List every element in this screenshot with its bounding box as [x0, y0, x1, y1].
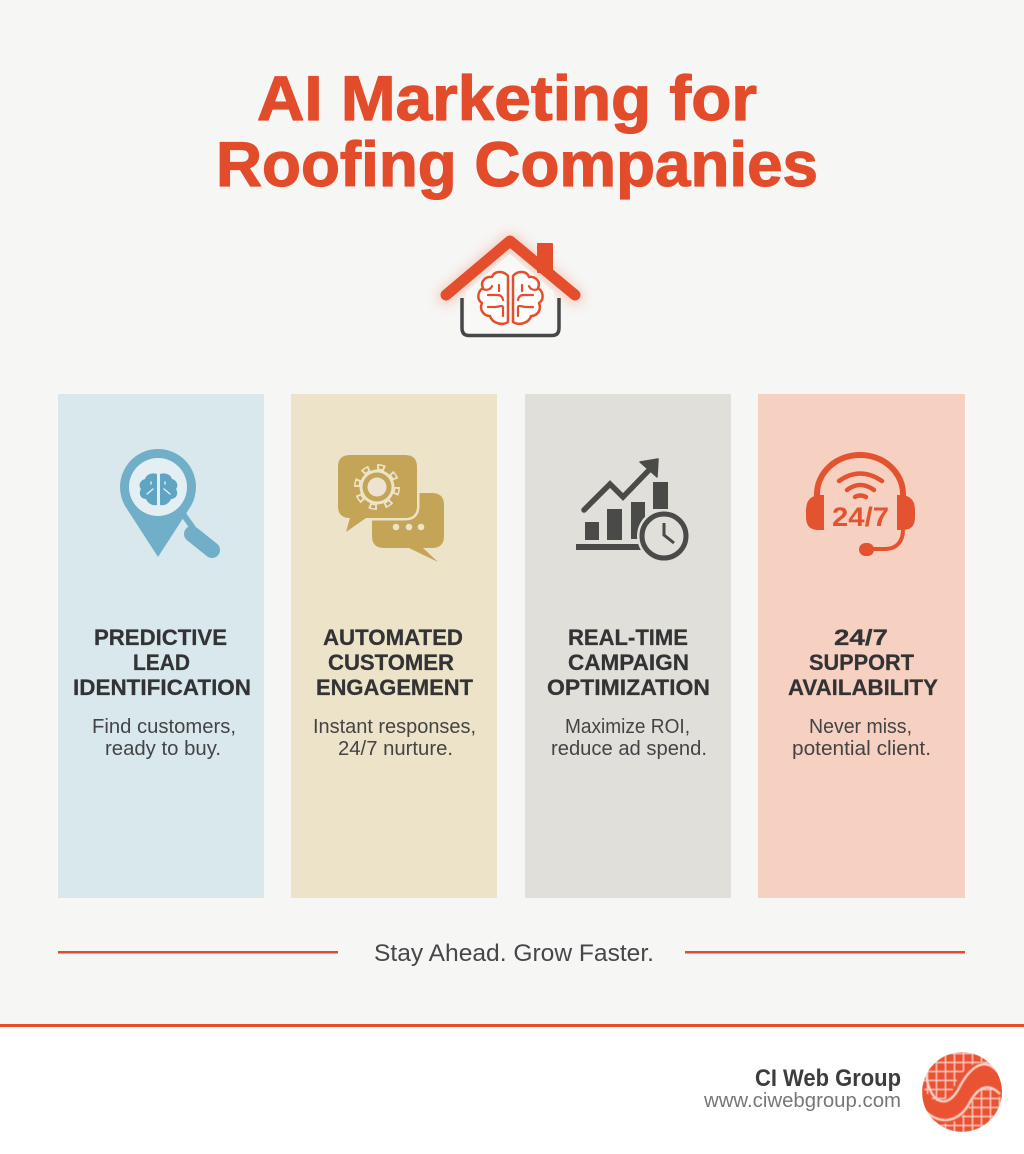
icon: location pin with magnifier and brain	[120, 449, 212, 557]
icon: chat bubbles with gear	[338, 455, 444, 562]
heading	[73, 625, 251, 700]
heading: 24/7	[834, 625, 888, 650]
title: Roofing Companies	[216, 130, 818, 200]
description: Instant responses,	[313, 716, 476, 738]
description: Never miss,	[809, 716, 912, 738]
heading: AVAILABILITY	[788, 675, 938, 700]
heading: CUSTOMER	[328, 650, 454, 675]
icon: growth chart with clock	[576, 459, 691, 563]
footer	[0, 1024, 1024, 1154]
description: 24/7 nurture.	[338, 738, 453, 760]
description	[792, 716, 931, 760]
description: Find customers,	[92, 716, 236, 738]
panel: 24/7 support availability	[758, 394, 965, 898]
heading: REAL-TIME	[568, 625, 688, 650]
title	[216, 64, 818, 200]
description: Maximize ROI,	[565, 716, 690, 738]
description	[92, 716, 236, 760]
logo	[922, 1052, 1004, 1132]
icon: headset with 24/7: 24/7	[832, 502, 889, 532]
brand name: CI Web Group	[755, 1065, 901, 1092]
description: ready to buy.	[105, 738, 221, 760]
heading	[788, 625, 938, 700]
description: reduce ad spend.	[551, 738, 707, 760]
icon: headset with 24/7	[806, 455, 915, 556]
website: www.ciwebgroup.com	[703, 1090, 901, 1112]
panel: automated customer engagement	[291, 394, 497, 898]
heading: AUTOMATED	[323, 625, 463, 650]
description: potential client.	[792, 738, 931, 760]
description	[313, 716, 476, 760]
description	[551, 716, 707, 760]
tagline with rules: Stay Ahead. Grow Faster.	[374, 940, 654, 967]
heading: CAMPAIGN	[568, 650, 689, 675]
heading: IDENTIFICATION	[73, 675, 251, 700]
heading: PREDICTIVE	[94, 625, 227, 650]
heading: LEAD	[133, 650, 190, 675]
panel: predictive lead identification	[58, 394, 264, 898]
title: AI Marketing for	[257, 64, 757, 134]
heading: OPTIMIZATION	[547, 675, 710, 700]
heading	[547, 625, 710, 700]
icon: house with brain	[445, 241, 576, 336]
heading: SUPPORT	[809, 650, 915, 675]
heading	[316, 625, 474, 700]
heading: ENGAGEMENT	[316, 675, 474, 700]
panel: real-time campaign optimization	[525, 394, 731, 898]
